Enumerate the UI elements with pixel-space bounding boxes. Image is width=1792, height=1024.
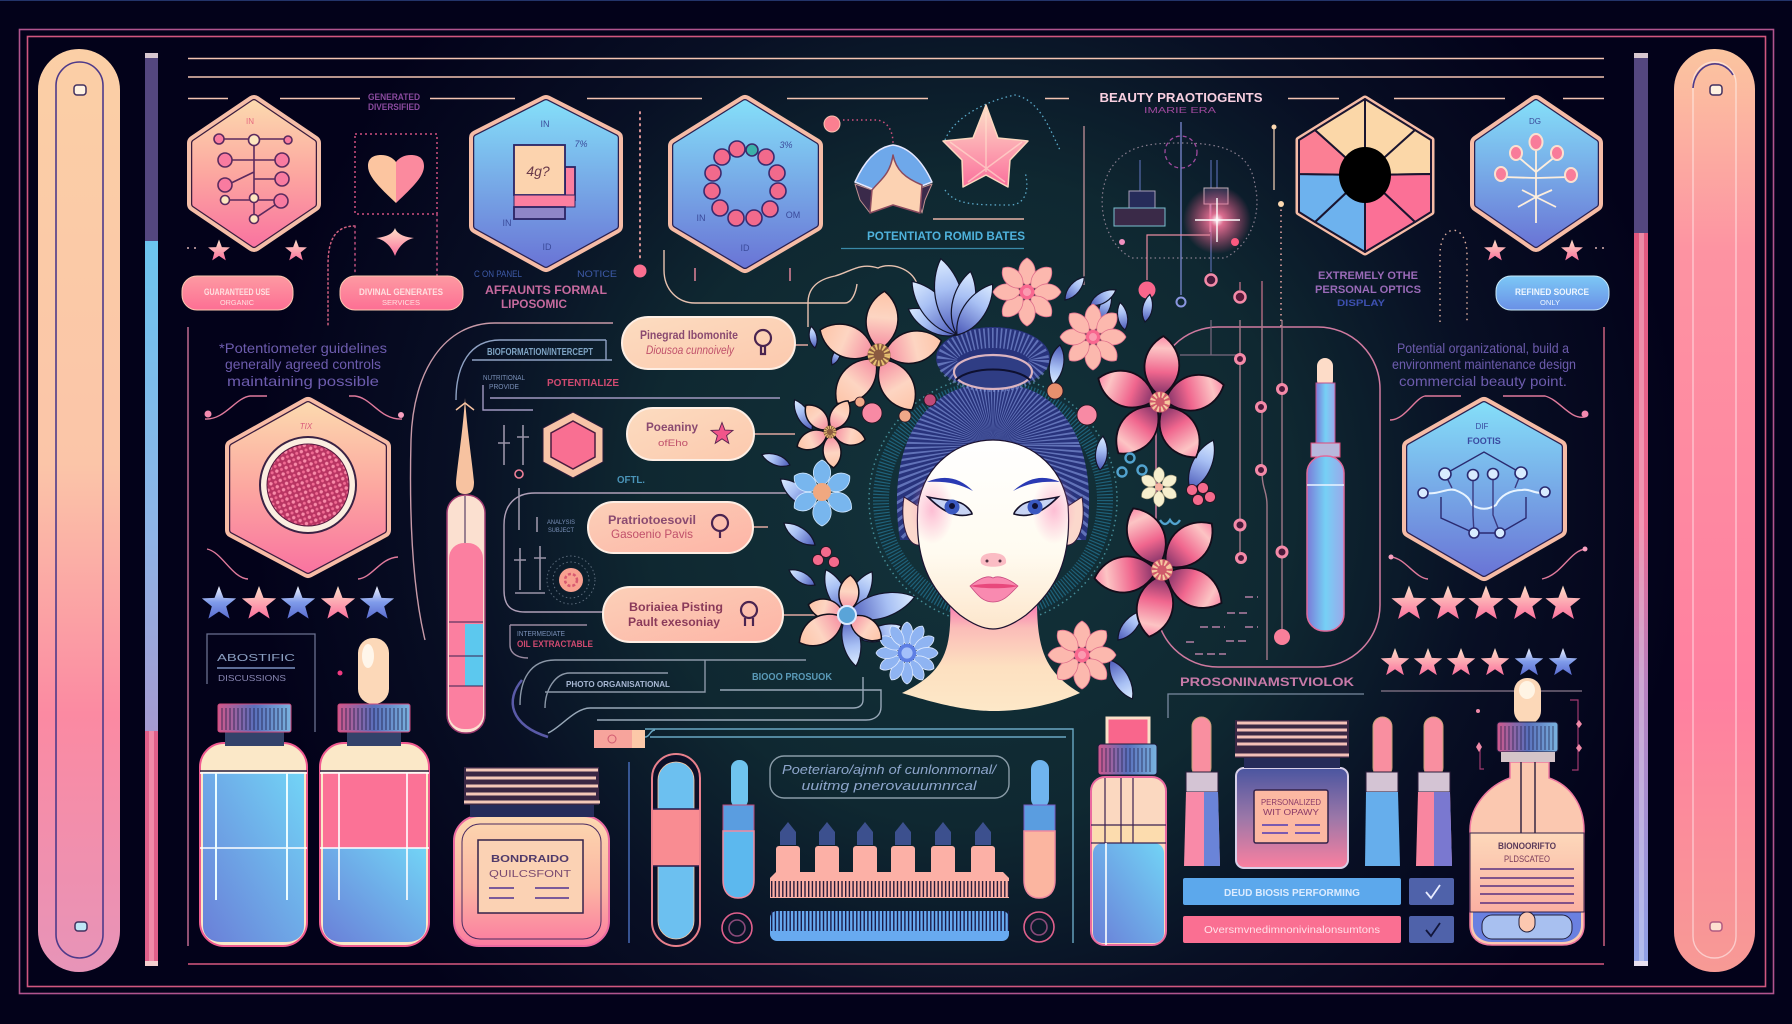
bottle label: [1470, 833, 1584, 912]
text block: right description: environment maintenance design: [1392, 356, 1576, 372]
hair bun: [936, 327, 1050, 389]
button: right: [1496, 276, 1609, 310]
small header label: [368, 92, 420, 112]
diagram: blueprint schematic: [1084, 122, 1284, 330]
illustration: bottle four with label: [1470, 678, 1584, 945]
panel: hexagon molecule: DIF: [1476, 422, 1489, 431]
heading: lower right label: [1168, 675, 1364, 718]
jar label: [478, 840, 583, 913]
text block: right description: [1392, 340, 1576, 389]
callout box: Poeteriaro/ajmh of cunlonmornal/: [782, 762, 998, 777]
illustration: tube two: [1365, 717, 1400, 866]
text block: right description: commercial beauty point.: [1399, 373, 1567, 389]
icon: target left: [722, 913, 752, 943]
labels in callout diagram: NUTRITIONAL: [483, 375, 525, 382]
panel: hexagon bead ring: [676, 103, 815, 265]
eye shadow blush: [910, 476, 1076, 544]
illustration: dropper tube A: [723, 760, 754, 898]
halo ring: [869, 376, 1117, 624]
illustration: portrait with flowers: [760, 256, 1253, 711]
lips: [970, 577, 1018, 602]
button: left one: ORGANIC: [220, 298, 255, 307]
right capsule panel: [1674, 49, 1755, 972]
button: left two: DIVINAL GENERATES: [359, 287, 443, 297]
label panel left: DISCUSSIONS: [218, 673, 286, 683]
icon: ring pin: [755, 330, 771, 354]
flower: blue mid left: [790, 460, 856, 526]
jar two label: [1254, 790, 1328, 843]
jar two label: PERSONALIZED: [1261, 798, 1321, 807]
flower leaves: [760, 256, 1222, 703]
text block: left description: *Potentiometer guidelines: [219, 340, 387, 356]
callout four: Boriaiea Pisting: [629, 600, 723, 614]
flower: large pink upper right: [1089, 333, 1231, 469]
right progress rail: [1634, 53, 1648, 966]
button: left two: [340, 276, 463, 310]
icon: heart: [368, 155, 424, 203]
illustration: comb peach: [770, 822, 1009, 898]
label panel left: ABOSTIFIC: [217, 653, 295, 664]
illustration: capsule: [652, 754, 700, 946]
small bracket decoration: [1476, 700, 1582, 770]
flower: mixed peach and blue: [793, 566, 918, 668]
bar: blue checklist row: DEUD BIOSIS PERFORMING: [1224, 888, 1360, 899]
heading: beauty ingredients: IMARIE ERA: [1144, 105, 1216, 115]
icon: ring pin: [712, 515, 728, 538]
panel: hexagon texture: TIX: [300, 422, 313, 431]
callout one: [622, 317, 795, 369]
sliders: [498, 425, 546, 593]
icon: check box two: [1409, 916, 1454, 943]
panel: hexagon document: ID: [542, 242, 552, 252]
pink node: [634, 264, 646, 278]
icon: radial pink seal: [547, 556, 595, 604]
illustration: cream jar: [454, 767, 609, 946]
callout box: [770, 756, 1009, 798]
labels in callout diagram: INTERMEDIATE: [517, 631, 565, 638]
flower: large pink lower right: [1070, 479, 1253, 659]
caption: right hexagon row: PERSONAL OPTICS: [1315, 284, 1421, 296]
rating stars right row one: [1391, 586, 1581, 619]
tag: [594, 730, 645, 748]
callout one: Pinegrad Ibomonite: [640, 328, 738, 342]
eyes: [928, 497, 1058, 515]
labels in callout diagram: BIOFORMATION/INTERCEPT: [487, 347, 593, 358]
illustration: jar two: [1235, 720, 1349, 868]
icon: stars under tree hexagon: [187, 240, 307, 260]
callout two: ofEho: [658, 438, 688, 449]
ears: [903, 497, 1083, 545]
callout two: Poeaniny: [646, 420, 698, 434]
button: left two: SERVICES: [382, 298, 420, 307]
panel: hexagon plant: [1478, 103, 1595, 244]
flower: pink mid: [1060, 304, 1126, 370]
text block: left description: [219, 340, 387, 389]
icon: document: [514, 145, 575, 219]
button: left one: GUARANTEED USE: [204, 287, 270, 297]
hexagon document captions: LIPOSOMIC: [501, 299, 567, 311]
hexagon document captions: AFFAUNTS FORMAL: [485, 285, 607, 297]
bottle label: BIONOORIFTO: [1498, 841, 1556, 852]
hexagon document captions: C ON PANEL: [474, 269, 522, 280]
icon: check box one: [1409, 878, 1454, 905]
labels in callout diagram: SUBJECT: [548, 527, 574, 534]
caption: right hexagon row: [1315, 270, 1421, 308]
icon: target right: [1024, 912, 1054, 942]
small blue buds: [1118, 454, 1180, 524]
top header rules: [188, 58, 1604, 98]
hexagon document captions: NOTICE: [577, 269, 617, 280]
illustration: tube three: [1416, 717, 1452, 866]
flower: cream small: [1139, 467, 1179, 507]
labels in callout diagram: OFTL.: [617, 475, 645, 486]
chart: colour wheel segments: [1299, 99, 1431, 252]
icon: four point star: [376, 228, 414, 256]
small header label: DIVERSIFIED: [368, 102, 420, 112]
jar label: QUILCSFONT: [489, 869, 571, 880]
curved connectors near callouts: [664, 250, 917, 327]
icon: gem connector: [824, 116, 893, 143]
bar: blue checklist row: [1183, 878, 1401, 905]
callout two: [627, 408, 754, 460]
button: right: ONLY: [1540, 298, 1560, 307]
labels in callout diagram: ANALYSIS: [547, 519, 576, 526]
callout box: uuitmg pnerovauumnrcal: [802, 778, 978, 793]
icon: star: [711, 422, 733, 443]
panel: heart box: [355, 134, 437, 214]
panel: hexagon bead ring: OM: [786, 210, 800, 220]
icon: textured pad: [259, 436, 357, 534]
panel: hexagon document: 7%: [574, 139, 588, 149]
labels in callout diagram: PROVIDE: [489, 384, 519, 391]
panel: hexagon colour wheel: [1299, 99, 1431, 252]
illustration: tube one: [1184, 717, 1220, 866]
labels in callout diagram: POTENTIALIZE: [547, 377, 619, 389]
panel: hexagon texture: [233, 405, 383, 570]
panel: hexagon molecule: FOOTIS: [1467, 436, 1501, 446]
pins: [695, 268, 790, 281]
small berries: [812, 383, 1216, 568]
bar: pink checklist row: Oversmvnedimnonivinalonsumtons: [1204, 925, 1380, 936]
caption: right hexagon row: EXTREMELY OTHE: [1318, 270, 1418, 282]
callout three: [588, 502, 753, 553]
heading: lower right label: PROSONINAMSTVIOLOK: [1180, 675, 1354, 689]
icon: ring pin: [741, 602, 757, 626]
panel: hexagon document: IN: [540, 119, 550, 129]
illustration: bottle one blue: [200, 704, 307, 946]
jar label: BONDRAIDO: [491, 853, 569, 865]
labels in callout diagram: BIOOO PROSUOK: [752, 672, 833, 683]
swoosh connectors left: [204, 396, 404, 579]
icon: plant: [1495, 134, 1577, 223]
panel: hexagon ingredient tree: IN: [246, 117, 254, 126]
brows: [927, 478, 1060, 491]
label panel left: [207, 634, 342, 732]
neck and shoulders: [902, 600, 1080, 711]
rating stars left: [202, 586, 394, 619]
divider and horizontal rails: [629, 729, 1073, 943]
panel: hexagon ingredient tree: [195, 103, 313, 244]
left progress rail: [145, 53, 158, 966]
caption: right hexagon row: DISPLAY: [1337, 298, 1385, 308]
icon: document: 4g?: [526, 163, 550, 179]
small header label: GENERATED: [368, 92, 420, 102]
button: left one: [182, 276, 293, 310]
flower: pink lower: [1048, 621, 1116, 689]
callout three: Gasoenio Pavis: [611, 527, 693, 541]
text block: right description: Potential organizational, build a: [1397, 340, 1569, 356]
panel: hexagon bead ring: ID: [740, 243, 750, 253]
flower: large peach: [808, 286, 950, 422]
icon: small hexagon: [543, 412, 603, 478]
panel: hexagon plant: DG: [1529, 117, 1541, 126]
panel: hexagon document: [477, 103, 615, 264]
icon: stars under plant hexagon: [1484, 240, 1604, 260]
nose: [981, 553, 1006, 567]
illustration: left applicator pen: [447, 398, 485, 733]
hair: [897, 380, 1089, 540]
illustration: dropper tube B: [1024, 760, 1055, 898]
flower: small peach star: [781, 382, 880, 480]
flower: blue daisy: [876, 622, 938, 684]
left capsule panel: [38, 49, 120, 972]
rule above bottle four: [1381, 690, 1582, 692]
illustration: right pen: [1307, 358, 1344, 631]
caption: potentiated rated: POTENTIATO ROMID BATES: [867, 229, 1025, 243]
dotted connectors: [328, 112, 640, 325]
flower: pink top: [993, 258, 1061, 326]
callout three: Pratriotoesovil: [608, 513, 696, 527]
text block: left description: generally agreed controls: [225, 356, 381, 372]
panel: hexagon molecule: [1410, 405, 1559, 573]
jar two label: WIT OPAWY: [1263, 808, 1320, 817]
rating stars right row two: [1381, 648, 1577, 675]
text block: left description: maintaining possible: [227, 373, 379, 389]
icon: pink star with dotted arcs: [943, 95, 1060, 205]
icon: molecule: [1418, 452, 1550, 538]
icon: gem: [855, 145, 932, 213]
panel: hexagon bead ring: IN: [696, 213, 706, 223]
labels in callout diagram: [483, 347, 833, 689]
button: right: REFINED SOURCE: [1515, 287, 1589, 297]
swoosh connectors right: [1388, 396, 1588, 579]
illustration: comb blue: [770, 911, 1009, 941]
hexagon document captions: [474, 269, 617, 311]
heading: beauty ingredients: BEAUTY PRAOTIOGENTS: [1100, 91, 1262, 105]
diagram: callout panel lines: [411, 323, 881, 733]
bottle label: PLDSCATEO: [1504, 854, 1550, 864]
panel: hexagon document: IN: [502, 218, 512, 228]
panel: hexagon bead ring: 3%: [779, 140, 793, 150]
dotted arch: [1440, 230, 1467, 322]
arc with dots: [513, 680, 548, 737]
icon: bead ring: [704, 141, 786, 226]
content frame rules: [188, 327, 1604, 964]
callout four: Pault exesoniay: [628, 615, 720, 629]
callout one: Diousoa cunnoively: [646, 345, 735, 357]
face: [917, 440, 1069, 629]
heading: beauty ingredients: [1100, 91, 1262, 115]
icon: ingredient tree: [214, 134, 292, 224]
labels in callout diagram: PHOTO ORGANISATIONAL: [566, 679, 670, 689]
diagram: right rounded panel with nodes: [1156, 320, 1380, 667]
callout four: [603, 587, 783, 642]
bar: pink checklist row: [1183, 916, 1401, 943]
illustration: dropper bottle two pink: [320, 638, 429, 946]
labels in callout diagram: OIL EXTRACTABLE: [517, 639, 593, 649]
illustration: bottle three: [1091, 718, 1166, 945]
